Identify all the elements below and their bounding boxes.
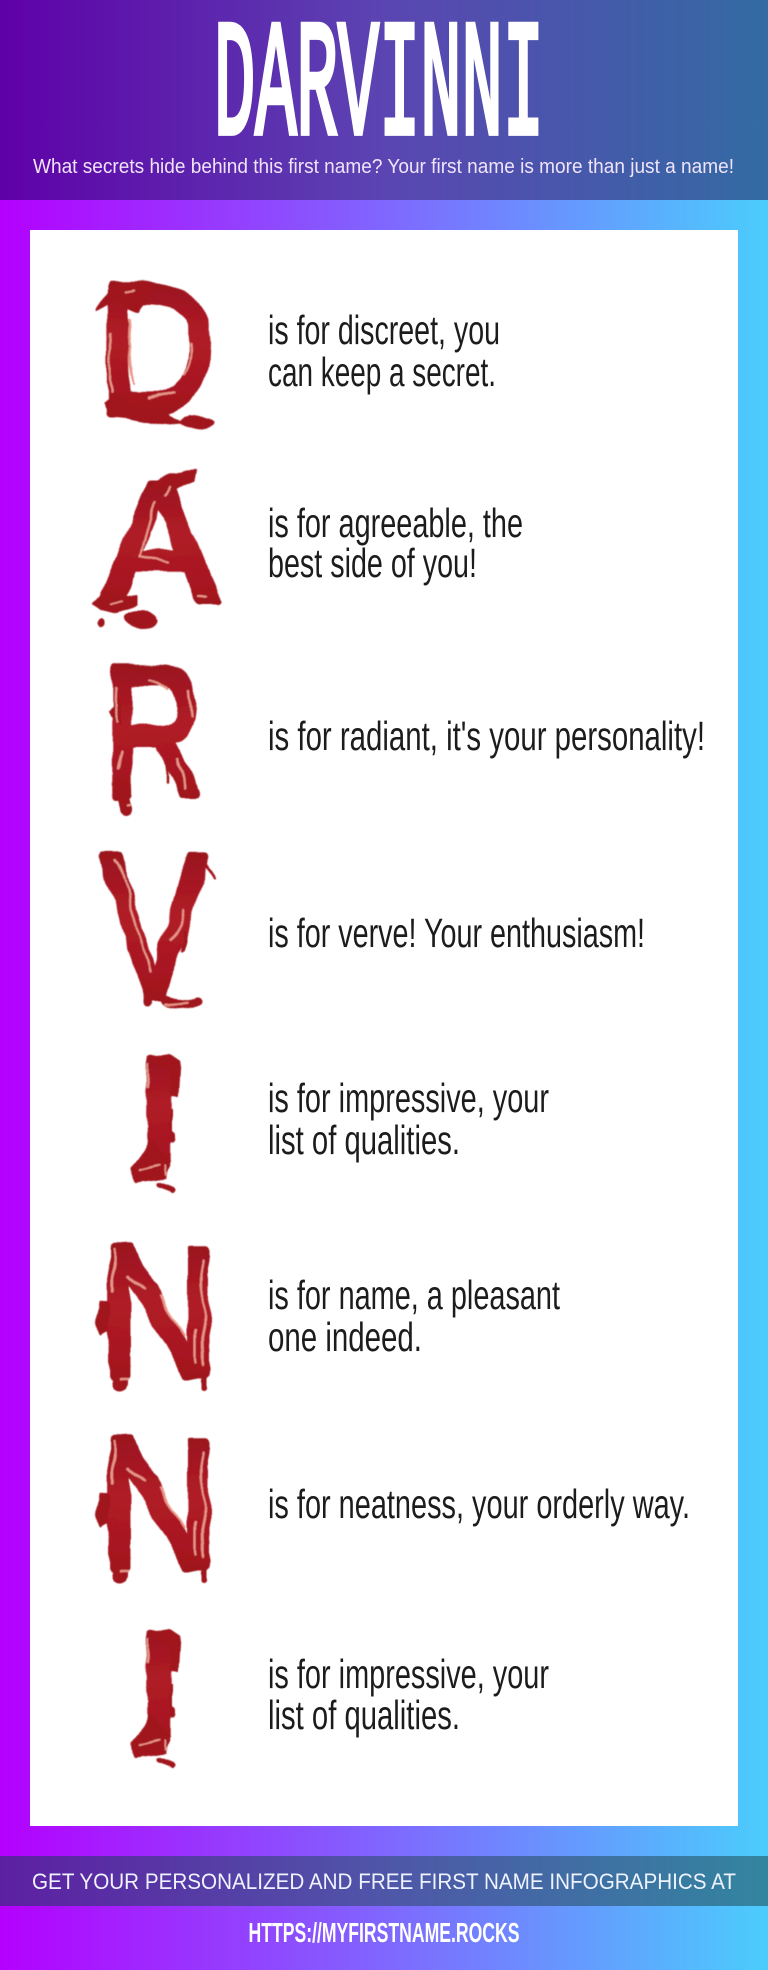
text: D line: is for discreet, you [268, 307, 500, 353]
text: N line [268, 1272, 560, 1360]
icon: blood letter N: N [99, 1210, 219, 1416]
text: A line: is for agreeable, the [268, 500, 523, 546]
row N [97, 1210, 560, 1416]
text: A line: best side of you! [268, 540, 477, 586]
text: I line: is for impressive, your [268, 1075, 549, 1121]
text: I second line: is for impressive, your [268, 1651, 549, 1697]
footer band [0, 1856, 768, 1906]
text: I second line: list of qualities. [268, 1692, 460, 1738]
header band [0, 0, 768, 200]
row N second [97, 1402, 690, 1608]
icon: blood letter I second: I [137, 1601, 181, 1774]
icon: blood letter N second: N [99, 1402, 219, 1608]
footer url: HTTPS://MYFIRSTNAME.ROCKS [248, 1917, 520, 1948]
icon: blood letter A: A [103, 448, 217, 638]
row I second [132, 1601, 549, 1774]
text: N line: is for name, a pleasant [268, 1272, 560, 1318]
icon: blood letter I: I [137, 1026, 181, 1199]
text: I line: list of qualities. [268, 1117, 460, 1163]
text: D line: can keep a secret. [268, 349, 496, 395]
text: D line [268, 307, 500, 395]
icon: blood letter D: D [97, 246, 215, 450]
panel: letters [30, 230, 738, 1826]
text: I line [268, 1075, 549, 1163]
row I [132, 1026, 549, 1199]
row R [105, 629, 705, 833]
icon: blood letter R: R [105, 629, 203, 833]
row V [102, 813, 645, 1040]
row A [92, 448, 523, 638]
row D [97, 246, 500, 450]
text: I second line [268, 1651, 549, 1738]
title: DARVINNI [214, 0, 544, 182]
subtitle: What secrets hide behind this first name? Your first name is more than just a name! [33, 156, 734, 178]
text: N line: one indeed. [268, 1314, 422, 1360]
icon: blood letter V: V [102, 813, 207, 1040]
text: A line [268, 500, 523, 586]
